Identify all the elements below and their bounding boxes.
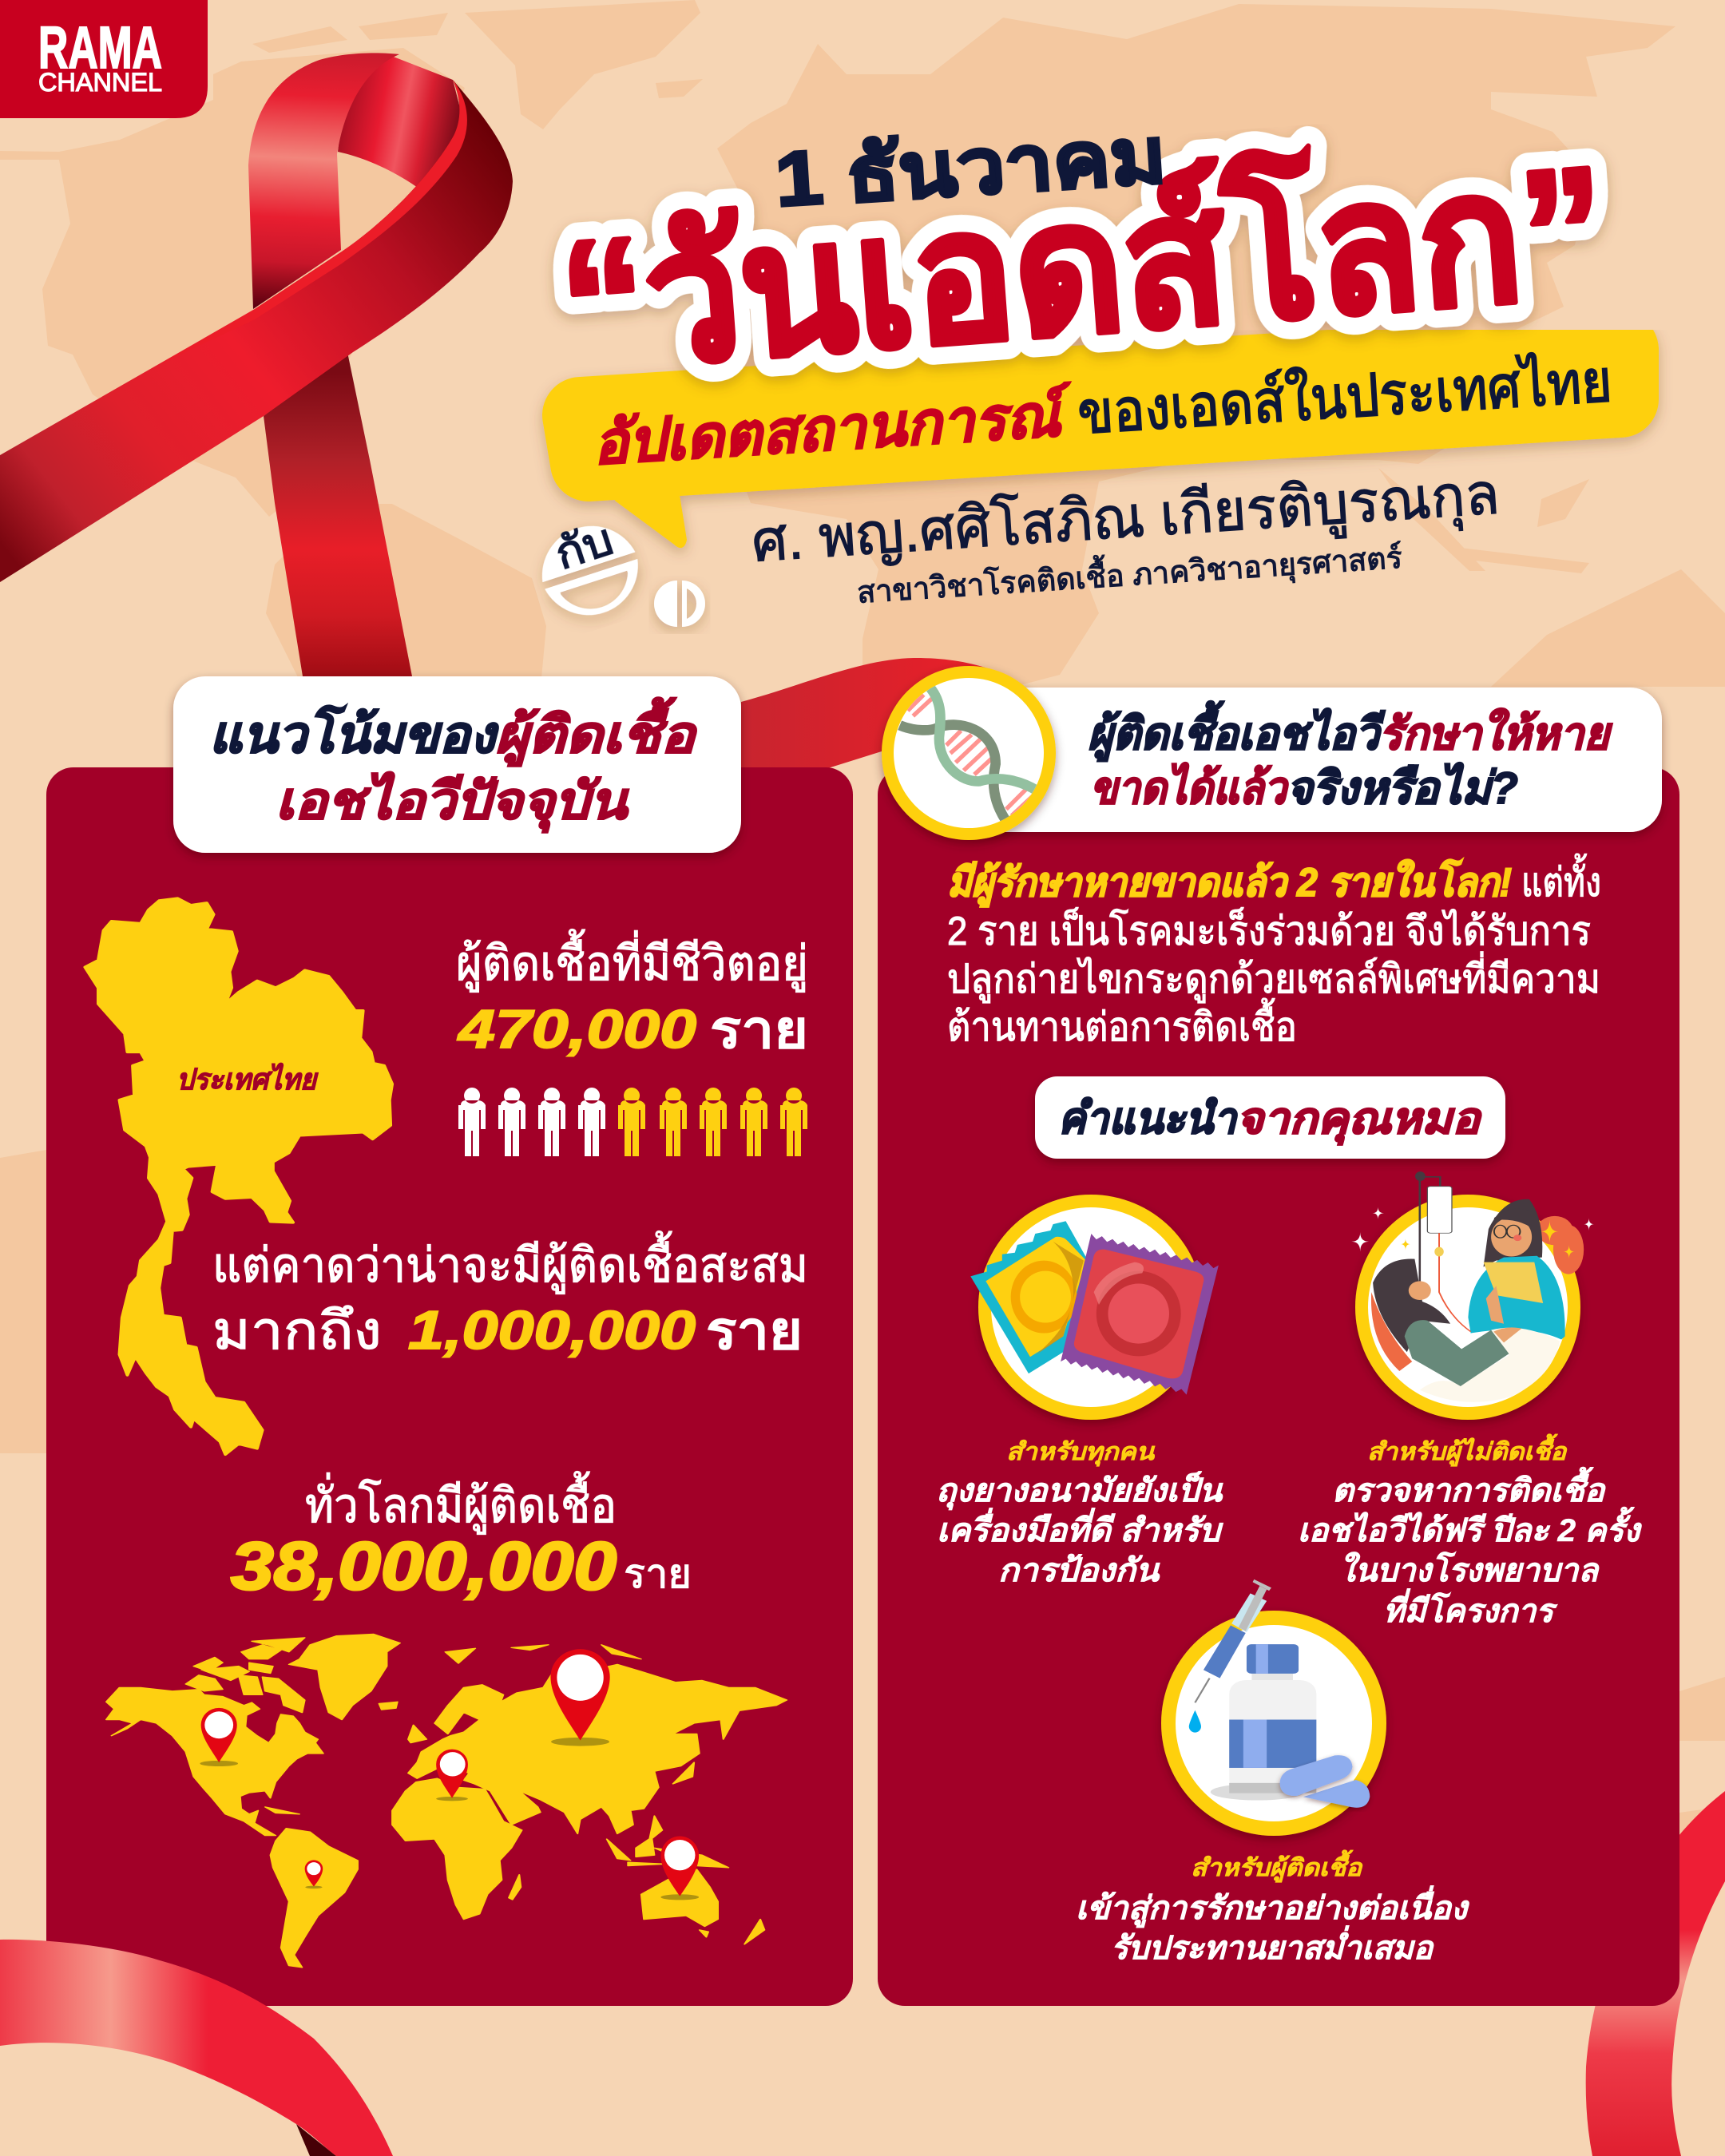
speech bubble: [581, 350, 1620, 546]
icon: dna: [882, 666, 1056, 840]
advice 2: line 3: ในบางโรงพยาบาล: [1339, 1551, 1600, 1588]
doctor blob: [1537, 1216, 1573, 1245]
map: thailand: [85, 898, 392, 1454]
right header line 1 red: รักษาให้หาย: [1379, 707, 1612, 759]
left header line 1 red: ผู้ติดเชื้อ: [495, 697, 698, 767]
right header line 2 navy: จริงหรือไม่?: [1287, 762, 1518, 813]
ribbon band behind header: [741, 658, 990, 768]
iv stand: [1420, 1177, 1440, 1286]
icon: medicine bottle and syringe: [1161, 1579, 1386, 1836]
pin: europe: [436, 1750, 468, 1801]
doctor name: ศ. พญ.ศศิโสภิณ เกียรติบูรณกุล: [750, 461, 1501, 577]
patient: [1371, 1292, 1412, 1371]
right header line 1 navy: ผู้ติดเชื้อเอชไอวี: [1088, 700, 1386, 762]
pin: north america: [200, 1708, 238, 1766]
title: world aids day: “วันเอดส์โลก”: [554, 125, 1612, 408]
paragraph: line 2: 2 ราย เป็นโรคมะเร็งร่วมด้วย จึงได้รับการ: [947, 907, 1591, 953]
advice 2: audience: สำหรับผู้ไม่ติดเชื้อ: [1367, 1433, 1568, 1467]
ribbon: bottom right: [1586, 1791, 1725, 2156]
logo: CHANNEL: [38, 68, 162, 97]
advice 2: line 4: ที่มีโครงการ: [1383, 1588, 1558, 1629]
stat: living with hiv label: ผู้ติดเชื้อที่มีชีวิตอยู่: [456, 929, 808, 993]
ribbon: large awareness ribbon: [0, 53, 513, 676]
panel: right cure: [878, 767, 1679, 2006]
advice 2: line 2: เอชไอวีได้ฟรี ปีละ 2 ครั้ง: [1298, 1506, 1643, 1548]
stat: global label: ทั่วโลกมีผู้ติดเชื้อ: [305, 1471, 617, 1535]
stat: projected label: แต่คาดว่าน่าจะมีผู้ติดเชื้อสะสม: [212, 1231, 808, 1294]
advice 1: line 3: การป้องกัน: [998, 1553, 1160, 1588]
pin: russia: [550, 1649, 610, 1746]
left header line 1 navy: แนวโน้มของ: [209, 704, 499, 763]
advice 1: audience: สำหรับทุกคน: [1006, 1439, 1156, 1467]
paragraph: line 1 end: แต่ทั้ง: [1521, 854, 1601, 905]
stat unit: ราย: [710, 1000, 808, 1059]
bubble text: update: อัปเดตสถานการณ์: [591, 381, 1075, 477]
advice 3: line 2: รับประทานยาสม่ำเสมอ: [1111, 1925, 1434, 1966]
ribbon: bottom left band: [0, 1940, 393, 2156]
logo: [0, 0, 208, 118]
paragraph: line 3: ปลูกถ่ายไขกระดูกด้วยเซลล์พิเศษที่มีความ: [947, 952, 1600, 1003]
advice 3: audience: สำหรับผู้ติดเชื้อ: [1191, 1849, 1363, 1883]
map label: ประเทศไทย: [176, 1063, 319, 1096]
right header line 2 red: ขาดได้แล้ว: [1090, 762, 1289, 813]
pill word: กับ: [549, 515, 619, 579]
icon: small pill: [654, 581, 705, 627]
stat unit: ราย: [624, 1552, 692, 1596]
advice red: จากคุณหมอ: [1236, 1095, 1482, 1145]
sparkles: [1351, 1207, 1594, 1252]
map: world: [106, 1634, 787, 1968]
title: date: 1 ธันวาคม: [773, 113, 1168, 223]
paragraph: cure highlight: มีผู้รักษาหายขาดแล้ว 2 รายในโลก!: [947, 858, 1512, 907]
stat: 470,000: 470,000: [457, 999, 696, 1060]
pin: australia: [660, 1837, 699, 1900]
stat: 1,000,000: 1,000,000: [408, 1300, 696, 1361]
advice 2: line 1: ตรวจหาการติดเชื้อ: [1332, 1466, 1606, 1508]
stat: projected prefix: มากถึง: [212, 1301, 382, 1360]
icon: condoms: [970, 1195, 1219, 1420]
icon: large pill: [529, 509, 650, 628]
title: world aids day: “วันเอดส์โลก”: [554, 125, 1612, 408]
doctor department: สาขาวิชาโรคติดเชื้อ ภาควิชาอายุรศาสตร์: [855, 535, 1403, 611]
advice pill: [1035, 1076, 1505, 1159]
logo: RAMA: [38, 14, 162, 81]
advice 1: line 2: เครื่องมือที่ดี สำหรับ: [937, 1508, 1223, 1548]
icon: doctor and patient: [1351, 1171, 1594, 1420]
stat: 38,000,000: 38,000,000: [231, 1528, 617, 1603]
advice 3: line 1: เข้าสู่การรักษาอย่างต่อเนื่อง: [1076, 1885, 1470, 1928]
bubble text: of aids in thailand: ของเอดส์ในประเทศไทย: [1076, 347, 1614, 446]
icon: people row: [458, 1088, 807, 1156]
pin: south america: [305, 1860, 323, 1888]
panel: left trends: [46, 767, 853, 2006]
header: left: [173, 676, 741, 853]
left header line 2: เอชไอวีปัจจุบัน: [276, 771, 629, 833]
advice navy: คำแนะนำ: [1058, 1095, 1239, 1143]
paragraph: line 4: ต้านทานต่อการติดเชื้อ: [947, 998, 1297, 1049]
advice 1: line 1: ถุงยางอนามัยยังเป็น: [936, 1471, 1223, 1511]
header: right: [950, 688, 1662, 832]
stat unit: ราย: [706, 1301, 803, 1360]
